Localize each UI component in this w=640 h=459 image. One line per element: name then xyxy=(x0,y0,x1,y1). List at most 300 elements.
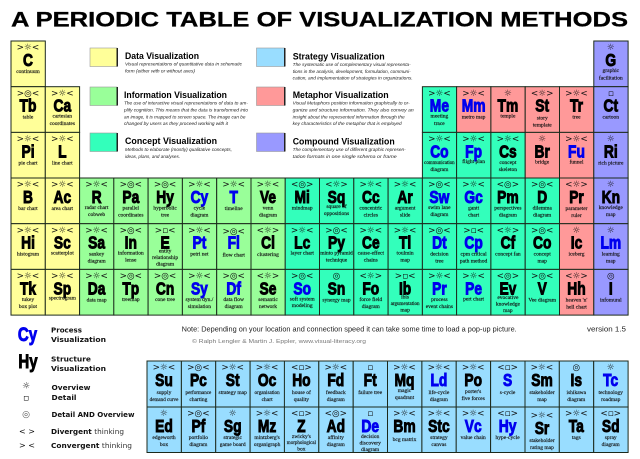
cell: So soft system modeling: soft system xyxy=(290,295,315,302)
cell: Cs concept skeleton: skeleton xyxy=(499,167,517,173)
cell: Lc layer chart: >☼< xyxy=(291,226,314,236)
cell: Is ishikawa diagram: ◎ xyxy=(572,363,580,373)
legend: detail and overview: Detail AND Overview xyxy=(52,411,135,419)
cell: Ev evocative knowledge map xyxy=(491,269,525,315)
cell: Ve venn diagram: diagram xyxy=(259,212,278,218)
cell: Tl toulmin map: map xyxy=(400,258,410,264)
cell: Tp treemap: >◎< xyxy=(120,272,142,282)
cell: Pf portfolio diagram: diagram xyxy=(189,442,208,448)
cell: Hy hyperbolic tree xyxy=(148,178,182,224)
cell: Da data map: Da xyxy=(88,280,106,299)
cell: Kn knowledge map xyxy=(594,178,628,224)
version: version 1.5 xyxy=(587,327,626,334)
cell: Pe pert chart: Pe xyxy=(465,280,482,299)
cell: Df data flow diagram: diagram xyxy=(225,304,243,310)
cell: Ct cartoon: ▫ xyxy=(608,89,614,99)
cell: Dt decision tree xyxy=(422,224,457,269)
cell: Sd spray diagram xyxy=(594,407,628,452)
cell: Pi pie chart xyxy=(11,132,45,178)
cell: In information lense: In xyxy=(125,234,137,253)
cell: Ar argument slide xyxy=(388,178,422,224)
cell: Br bridge xyxy=(525,132,560,178)
cell: Mm metro map: >☼< xyxy=(462,89,485,99)
cell: Fd feedback diagram: Fd xyxy=(327,372,344,390)
cell: Sr stakeholder rating map xyxy=(525,407,559,452)
cell: Pr process event chains: Pr xyxy=(432,280,447,299)
cell: Pm perspectives diagram: perspectives xyxy=(494,206,521,212)
cell: Gc gantt chart xyxy=(457,178,491,224)
legend: compound visualization: The complementary use of different graphic represen- xyxy=(293,147,406,152)
cell: In information lense: information xyxy=(118,250,144,257)
cell: Ta tags: tags xyxy=(572,435,581,441)
cell: Kn knowledge map: map xyxy=(606,212,616,218)
cell: Hy hyperbolic tree: >◎< xyxy=(154,180,176,190)
cell: Sw swim lane diagram: Sw xyxy=(429,189,450,207)
cell: Sq square of oppositions: oppositions xyxy=(324,211,349,217)
cell: De decision discovery diagram: diagram xyxy=(361,447,380,453)
cell: So soft system modeling xyxy=(285,269,320,315)
cell: Pe pert chart xyxy=(457,269,491,315)
cell: So soft system modeling: >◎< xyxy=(291,272,313,282)
cell: L line chart: L xyxy=(58,143,67,162)
cell: Lm learning map: map xyxy=(606,259,616,265)
legend: process visualization: Process xyxy=(51,326,82,334)
cell: Pt petri net: Pt xyxy=(192,234,207,253)
cell: Cy cycle diagram: Cy xyxy=(191,189,208,207)
cell: S s-cycle xyxy=(491,361,525,407)
cell: Ed edgeworth box: edgeworth xyxy=(152,435,176,441)
cell: Sp spectrogram: >☼< xyxy=(51,272,74,282)
cell: Hy hyperbolic tree: hyperbolic xyxy=(153,206,177,212)
cell: Ld life-cycle diagram: life-cycle xyxy=(429,389,450,396)
cell: Ca cartesian coordinates: >☼< xyxy=(51,89,74,99)
cell: Cp cpm critical path method xyxy=(457,224,491,269)
note text: Note: Depending on your location and connection speed it can take some time to load a pop-up picture. xyxy=(182,327,517,334)
cell: Me meeting trace: >☼< xyxy=(428,89,451,99)
cell: Ad affinity diagram: <◎> xyxy=(325,409,347,419)
cell: Cs concept skeleton: concept xyxy=(499,160,517,166)
legend: convergent thinking: Convergent thinking xyxy=(51,442,132,450)
cell: Pm perspectives diagram: Pm xyxy=(497,189,519,207)
cell: Cs concept skeleton xyxy=(491,132,525,178)
legend: information visualization xyxy=(90,87,248,126)
cell: St story template: template xyxy=(533,123,552,129)
cell: Is ishikawa diagram xyxy=(559,361,594,407)
cell: Pi pie chart: Pi xyxy=(21,143,35,162)
cell: Pr parameter ruler xyxy=(560,178,594,224)
cell: Ct cartoon: Ct xyxy=(604,97,619,116)
cell: Lm learning map xyxy=(594,224,628,269)
cell: S s-cycle: <▫> xyxy=(497,363,518,373)
legend: convergent thinking: > < xyxy=(19,441,35,450)
cell: Lm learning map: learning xyxy=(602,252,620,258)
cell: Po porter's five forces: Po xyxy=(464,372,482,390)
legend: metaphor visualization: ganize and structure information. They also convey an xyxy=(293,108,414,112)
cell: Cc concentric circles xyxy=(354,178,388,224)
cell: Tm temple: temple xyxy=(500,114,516,120)
cell: St story template: <☼> xyxy=(531,89,554,99)
cell: Ta tags: >☼< xyxy=(565,409,588,419)
cell: Sr stakeholder rating map: Sr xyxy=(535,420,549,438)
legend: information visualization: plify cognition. This means that the data is transformed into xyxy=(123,108,248,112)
cell: Hh heaven 'n' hell chart: Hh xyxy=(567,280,586,299)
cell: Pr parameter ruler: ruler xyxy=(571,213,582,219)
cell: St story template: story xyxy=(537,116,548,122)
cell: Tl toulmin map: toulmin xyxy=(397,251,414,257)
cell: So soft system modeling: So xyxy=(293,280,311,299)
cell: Fu funnel: >☼< xyxy=(565,135,588,145)
cell: Mm metro map: Mm xyxy=(462,97,485,116)
cell: G graphic facilitation: facilitation xyxy=(599,74,623,82)
cell: Cf concept fan xyxy=(491,224,525,269)
cell: Oc organisation chart: chart xyxy=(262,397,273,403)
cell: Df data flow diagram xyxy=(217,269,251,315)
cell: Tb table xyxy=(11,87,45,132)
cell: Pe pert chart: >☼< xyxy=(462,272,485,282)
cell: Sg strategic game board: Sg xyxy=(224,418,242,436)
cell: Ib ibis argumentation map xyxy=(388,269,422,315)
cell: Bm bcg matrix xyxy=(388,407,422,452)
title: A PERIODIC TABLE OF VISUALIZATION METHODS xyxy=(11,8,628,32)
cell: Py minto pyramid technique: technique xyxy=(326,258,348,264)
cell: D dilemma diagram: D xyxy=(537,189,547,207)
cell: Sa sankey diagram: Sa xyxy=(88,234,105,253)
cell: Cs concept skeleton: Cs xyxy=(499,143,517,162)
cell: Ld life-cycle diagram xyxy=(422,361,456,407)
cell: E entity relationship diagram: entity xyxy=(159,249,172,255)
cell: Pt petri net xyxy=(182,224,217,269)
cell: Sr stakeholder rating map: >☼< xyxy=(531,411,553,421)
cell: Su supply demand curve: supply xyxy=(157,390,172,396)
cell: Pf portfolio diagram: portfolio xyxy=(189,434,208,441)
cell: Se semantic network: semantic xyxy=(258,297,278,303)
cell: Pa parallel coordinates: >◎< xyxy=(120,180,142,190)
cell: Tr tree: >☼< xyxy=(565,89,588,99)
cell: Ce cause-effect chains: Ce xyxy=(362,234,380,253)
cell: G graphic facilitation xyxy=(594,41,628,87)
cell: Me meeting trace: meeting xyxy=(431,114,449,120)
cell: Co communication diagram: Co xyxy=(430,143,449,162)
cell: Fu funnel: Fu xyxy=(568,143,585,162)
cell: Sy system dynamics simulation: simulation xyxy=(188,304,211,310)
cell: De decision discovery diagram: discovery xyxy=(360,440,381,446)
cell: Pa parallel coordinates: coordinates xyxy=(118,212,143,218)
cell: Lc layer chart: Lc xyxy=(294,234,310,253)
cell: Sm stakeholder map: >☼< xyxy=(531,363,553,373)
cell: Ev evocative knowledge map: knowledge xyxy=(496,301,521,307)
cell: Sm stakeholder map: Sm xyxy=(531,372,553,390)
cell: Cp cpm critical path method: >▫< xyxy=(463,226,484,236)
cell: Co concept map: Co xyxy=(533,234,551,253)
cell: Sd spray diagram: <▫> xyxy=(600,409,621,419)
cell: Tb table: >◎< xyxy=(17,89,39,99)
cell: Mq magic quadrant xyxy=(388,361,422,407)
cell: Ho house of quality: <▫> xyxy=(291,363,312,373)
cell: Ed edgeworth box xyxy=(147,407,181,452)
cell: Mi mindmap: <◎> xyxy=(291,180,313,190)
cell: T timeline: >☼< xyxy=(222,180,245,190)
cell: Tb table: Tb xyxy=(20,97,36,116)
cell: Pc performance charting: Pc xyxy=(190,372,207,390)
cell: B bar chart xyxy=(11,178,45,224)
cell: Pr parameter ruler: Pr xyxy=(569,189,584,207)
cell: Cc concentric circles: concentric xyxy=(359,206,383,212)
cell: Mz mintzberg's organigraph: >☼< xyxy=(256,409,278,419)
cell: Gc gantt chart: chart xyxy=(468,212,480,218)
legend: metaphor visualization: Metaphor Visualization xyxy=(293,90,389,100)
cell: Pf portfolio diagram: Pf xyxy=(191,418,206,436)
cell: Pr process event chains xyxy=(422,269,457,315)
cell: Tk tukey box plot: tukey xyxy=(22,297,34,303)
cell: Vc value chain: value chain xyxy=(461,435,486,441)
cell: Df data flow diagram: Df xyxy=(226,280,242,299)
cell: Da data map xyxy=(80,269,114,315)
cell: Pa parallel coordinates xyxy=(114,178,148,224)
cell: Sa sankey diagram xyxy=(80,224,114,269)
cell: Ho house of quality xyxy=(284,361,319,407)
cell: Ic iceberg xyxy=(560,224,594,269)
cell: E entity relationship diagram xyxy=(148,224,182,269)
cell: Ed edgeworth box: Ed xyxy=(155,418,173,436)
cell: Cy cycle diagram xyxy=(182,178,217,224)
cell: D dilemma diagram: >◎< xyxy=(531,180,553,190)
cell: G graphic facilitation: G xyxy=(605,52,616,70)
cell: Ce cause-effect chains xyxy=(354,224,388,269)
cell: Hh heaven 'n' hell chart: <☼> xyxy=(565,272,588,282)
legend: information visualization: The use of interactive visual representations of data to am- xyxy=(124,100,248,106)
cell: Sw swim lane diagram xyxy=(422,178,457,224)
cell: Pi pie chart: pie chart xyxy=(18,160,38,166)
cell: Hi histogram: Hi xyxy=(21,234,35,253)
cell: Oc organisation chart: organisation xyxy=(255,390,280,396)
cell: Sp spectrogram xyxy=(45,269,80,315)
cell: Ar argument slide: slide xyxy=(400,212,411,218)
cell: E entity relationship diagram: diagram xyxy=(156,262,175,268)
cell: Tm temple xyxy=(491,87,525,132)
cell: Tk tukey box plot: Tk xyxy=(20,280,36,299)
cell: Cp cpm critical path method: path method xyxy=(460,259,488,265)
cell: Pr process event chains: process xyxy=(431,297,448,303)
cell: Ca cartesian coordinates xyxy=(45,87,80,132)
legend: metaphor visualization: insight about the represented information through the xyxy=(293,114,405,120)
cell: Hy hyperbolic tree: tree xyxy=(161,212,170,218)
legend: compound visualization: Compound Visualization xyxy=(293,136,395,146)
cell: Mi mindmap: Mi xyxy=(295,189,310,207)
cell: Sy system dynamics simulation xyxy=(182,269,217,315)
cell: Ca cartesian coordinates: coordinates xyxy=(50,121,75,127)
cell: Su supply demand curve xyxy=(147,361,181,407)
cell: Me meeting trace xyxy=(422,87,457,132)
cell: Fp flight plan: >☼< xyxy=(462,135,485,145)
cell: Vc value chain: Vc xyxy=(465,418,482,436)
cell: Ev evocative knowledge map: <◎> xyxy=(497,272,519,282)
cell: Ft failure tree: ▫ xyxy=(367,363,373,373)
cell: Df data flow diagram: data flow xyxy=(223,296,244,303)
cell: Ac area chart: area chart xyxy=(52,206,74,212)
cell: Fd feedback diagram: >☼< xyxy=(324,363,347,373)
cell: Dt decision tree: Dt xyxy=(432,234,447,253)
legend: strategy visualization: The systematic use of complementary visual representa- xyxy=(293,62,411,67)
cell: In information lense: >◎< xyxy=(120,226,142,236)
legend: data visualization: form (either with or without axes) xyxy=(125,68,195,74)
cell: De decision discovery diagram: ▫ xyxy=(367,409,373,419)
cell: Df data flow diagram: >◎< xyxy=(222,272,245,282)
legend: divergent thinking: Divergent thinking xyxy=(51,428,124,436)
strategy table xyxy=(147,361,628,453)
cell: L line chart: line chart xyxy=(52,160,73,166)
cell: Mz mintzberg's organigraph xyxy=(250,407,284,452)
cell: Ca cartesian coordinates: Ca xyxy=(53,97,71,116)
cell: Ce cause-effect chains: chains xyxy=(364,258,378,264)
cell: Ib ibis argumentation map: argumentation xyxy=(391,302,420,307)
cell: Gc gantt chart: >☼< xyxy=(462,180,485,190)
cell: Dt decision tree: tree xyxy=(435,259,444,265)
cell: In information lense xyxy=(114,224,148,269)
cell: Pc performance charting: performance xyxy=(186,389,212,396)
cell: Pf portfolio diagram: >◎< xyxy=(187,409,210,419)
cell: Ad affinity diagram xyxy=(319,407,353,452)
cell: T timeline xyxy=(217,178,251,224)
cell: Stc strategy canvas: canvas xyxy=(431,442,446,448)
cell: Bm bcg matrix: bcg matrix xyxy=(393,437,417,443)
cell: St strategy map: strategy map xyxy=(219,390,247,396)
cell: Sc scatterplot: scatterplot xyxy=(51,251,74,257)
legend: metaphor visualization: key characteristics of the metaphor that is employed xyxy=(293,121,402,126)
cell: Fd feedback diagram: diagram xyxy=(327,397,346,403)
cell: Fl flow chart: Fl xyxy=(228,234,240,253)
cell: Cl clustering: <☼> xyxy=(257,226,279,236)
cell: Cl clustering xyxy=(251,224,285,269)
cell: Cp cpm critical path method: cpm critical xyxy=(461,252,487,258)
cell: R radar chart cobweb xyxy=(80,178,114,224)
cell: Co concept map: concept xyxy=(534,252,551,258)
cell: Ri rich picture xyxy=(594,132,628,178)
cell: Sn synergy map xyxy=(320,269,354,315)
legend: strategy visualization: cation, and implementation of strategies in organizations. xyxy=(293,76,413,80)
cell: St story template xyxy=(525,87,560,132)
cell: Mq magic quadrant: >☼< xyxy=(393,363,416,373)
cell: Ce cause-effect chains: cause-effect xyxy=(358,250,384,257)
cell: R radar chart cobweb: >☼< xyxy=(85,180,108,190)
cell: Sr stakeholder rating map: stakeholder xyxy=(529,438,555,444)
cell: Bm bcg matrix: >☼< xyxy=(393,409,416,419)
cell: Py minto pyramid technique: >◎< xyxy=(325,226,348,236)
cell: Po porter's five forces: porter's xyxy=(465,389,481,395)
cell: D dilemma diagram: dilemma xyxy=(533,206,552,212)
legend: structure visualization: Structure xyxy=(51,356,91,364)
legend: divergent thinking xyxy=(19,427,124,436)
cell: Gc gantt chart: Gc xyxy=(464,189,483,207)
cell: Hh heaven 'n' hell chart: heaven 'n' xyxy=(566,297,587,303)
legend: detail and overview xyxy=(22,410,135,420)
cell: Fd feedback diagram xyxy=(319,361,353,407)
cell: Is ishikawa diagram: ishikawa xyxy=(567,390,587,396)
cell: Mz mintzberg's organigraph: mintzberg's xyxy=(254,435,280,441)
cell: Pr parameter ruler: parameter xyxy=(566,206,588,212)
cell: Dt decision tree: decision xyxy=(430,252,449,258)
cell: Pa parallel coordinates: Pa xyxy=(122,189,139,207)
cell: Ho house of quality: Ho xyxy=(292,372,311,390)
cell: Fp flight plan: Fp xyxy=(465,143,482,162)
legend: overview and detail: ▫ xyxy=(23,394,29,404)
cell: Pt petri net: >☼< xyxy=(188,226,211,236)
legend: information visualization: Information Visualization xyxy=(124,90,227,100)
cell: G graphic facilitation: ☼ xyxy=(607,43,615,53)
cell: Tr tree: tree xyxy=(572,115,581,121)
cell: Z zwicky's morphological box: box xyxy=(297,446,306,452)
cell: Br bridge: bridge xyxy=(535,159,550,165)
cell: Sq square of oppositions: <☼> xyxy=(325,180,348,190)
cell: Py minto pyramid technique xyxy=(320,224,354,269)
cell: Z zwicky's morphological box: Z xyxy=(297,418,306,436)
cell: St strategy map: St xyxy=(226,372,240,390)
cell: Ho house of quality: house of xyxy=(292,389,311,396)
legend: compound visualization: tation formats in one single schema or frame xyxy=(293,154,397,159)
cell: Tc technology roadmap: ☼ xyxy=(607,363,615,373)
cell: Br bridge: Br xyxy=(535,143,550,162)
cell: Cn cone tree xyxy=(148,269,182,315)
cell: Tc technology roadmap: technology xyxy=(598,390,623,396)
cell: Ri rich picture: rich picture xyxy=(598,160,624,166)
cell: Cy cycle diagram: diagram xyxy=(190,212,209,218)
cell: Fo force field diagram: diagram xyxy=(362,304,381,310)
cell: Po porter's five forces xyxy=(456,361,491,407)
cell: R radar chart cobweb: cobweb xyxy=(88,212,105,218)
legend: data visualization xyxy=(90,48,243,74)
legend: concept visualization xyxy=(90,133,232,159)
cell: Kn knowledge map: Kn xyxy=(602,189,620,207)
cell: Ev evocative knowledge map: map xyxy=(503,308,513,314)
legend: data visualization: Data Visualization xyxy=(125,51,199,61)
cell: Ib ibis argumentation map: Ib xyxy=(399,280,411,299)
cell: R radar chart cobweb: radar chart xyxy=(85,205,109,211)
cell: Ar argument slide: Ar xyxy=(397,189,413,207)
cell: Ld life-cycle diagram: >☼< xyxy=(428,363,450,373)
cell: Pr parameter ruler: <☼> xyxy=(565,180,588,190)
cell: Cc concentric circles: circles xyxy=(364,212,378,218)
cell: Ve venn diagram: Ve xyxy=(260,189,276,207)
cell: R radar chart cobweb: R xyxy=(92,189,102,207)
cell: Da data map: data map xyxy=(87,297,107,303)
cell: Ld life-cycle diagram: Ld xyxy=(430,372,447,390)
cell: E entity relationship diagram: E xyxy=(160,234,170,253)
cell: Ev evocative knowledge map: Ev xyxy=(499,280,517,299)
cell: Stc strategy canvas: >☼< xyxy=(428,409,450,419)
cell: Ac area chart: >☼< xyxy=(51,180,74,190)
cell: Hi histogram: histogram xyxy=(17,252,40,258)
cell: Fu funnel xyxy=(560,132,594,178)
cell: Ta tags: Ta xyxy=(569,418,584,436)
cell: Cf concept fan: Cf xyxy=(501,234,516,253)
cell: I infomural: I xyxy=(609,280,613,299)
legend: detail and overview: ◎ xyxy=(22,410,30,420)
cell: Co communication diagram: >☼< xyxy=(428,135,451,145)
legend: metaphor visualization xyxy=(256,87,414,126)
cell: Fl flow chart: >◎< xyxy=(222,227,245,237)
cell: Ar argument slide: argument xyxy=(395,206,416,212)
cell: Pc performance charting xyxy=(181,361,216,407)
legend: concept visualization: ideas, plans, and analyses. xyxy=(125,154,180,159)
cell: Oc organisation chart: >☼< xyxy=(256,363,278,373)
cell: Tk tukey box plot xyxy=(11,269,45,315)
cell: Sg strategic game board xyxy=(216,407,250,452)
legend: divergent thinking: < > xyxy=(19,427,35,436)
legend: process visualization xyxy=(18,324,106,345)
cell: Sa sankey diagram: sankey xyxy=(89,252,104,258)
cell: Cc concentric circles: >☼< xyxy=(359,180,382,190)
cell: B bar chart: B xyxy=(23,189,33,207)
legend: information visualization: an image, it is mapped to screen space. The image can be xyxy=(124,114,246,120)
